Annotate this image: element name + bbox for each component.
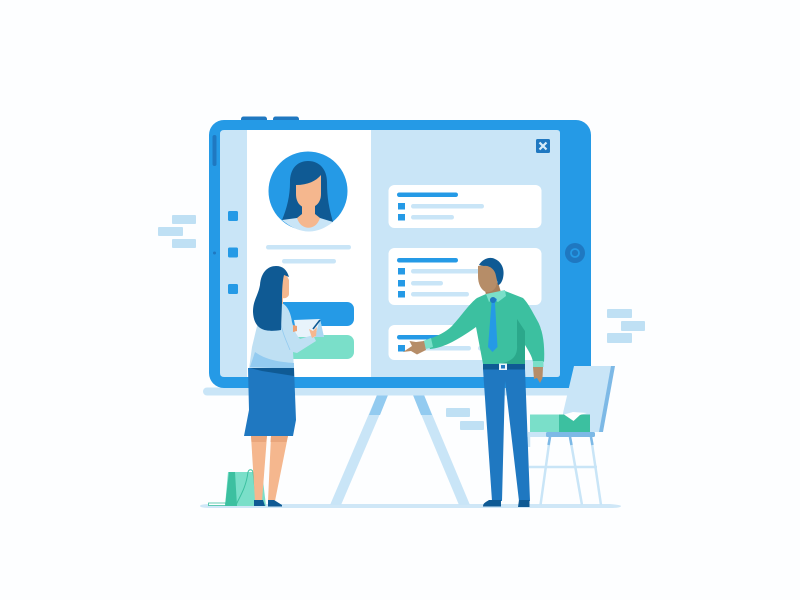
right hand [533,367,543,383]
home button [565,243,585,263]
avatar [268,152,348,232]
stand shelf [203,388,595,396]
chair [528,366,615,505]
green box on chair [530,412,590,432]
belt [483,364,525,370]
neck [485,282,502,302]
green button [270,335,354,359]
cuffs [423,338,433,349]
close icon [536,139,550,153]
clipboard [294,319,324,337]
face [278,272,289,304]
tie [488,297,498,352]
skirt [244,368,296,436]
shoes [483,500,501,506]
details panel [371,130,560,377]
rail icons [228,211,238,294]
pointing hand [403,341,426,354]
pants [483,369,530,501]
side dashes centre [446,408,484,430]
hair [253,266,289,331]
side dashes left [158,215,196,248]
blue button [270,302,354,326]
card 2 [388,248,542,305]
side dashes right [607,309,645,343]
ground line [200,504,621,508]
card 3 [388,325,542,360]
head [478,264,497,292]
shirt [249,303,316,369]
man figure [403,258,544,507]
profile name lines [266,245,351,264]
tablet frame [209,120,591,388]
hands and pen [293,320,320,338]
woman figure [208,266,324,506]
tablet speaker and sensor [212,135,216,254]
card 1 [388,185,542,228]
legs [251,436,267,501]
profile panel [247,130,371,377]
collar [486,290,506,302]
hair [479,258,504,285]
shoes [254,500,265,506]
shopping bag [208,470,266,506]
tablet top buttons [241,116,299,122]
stand legs [330,395,470,505]
screen left rail [220,130,247,377]
shirt [426,291,544,364]
